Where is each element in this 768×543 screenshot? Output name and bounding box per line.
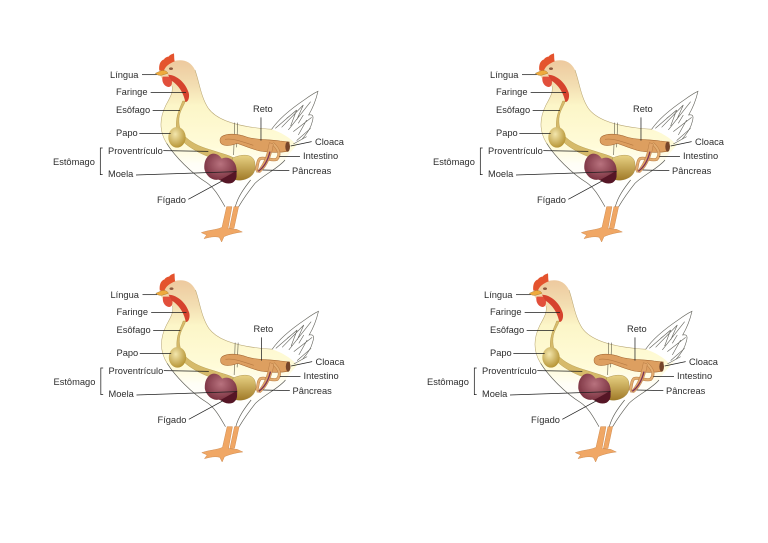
labels 2: Moela: [488, 169, 514, 179]
labels 2: Reto: [633, 104, 653, 114]
labels 1: Intestino: [303, 151, 338, 161]
labels 2: Proventrículo: [488, 146, 543, 156]
labels 4: Faringe: [490, 307, 522, 317]
labels 1: Esôfago: [116, 105, 150, 115]
labels 4: Língua: [484, 290, 513, 300]
labels 3: [54, 290, 345, 425]
labels 4: Proventrículo: [482, 366, 537, 376]
labels 4: Cloaca: [689, 357, 719, 367]
labels 3: Cloaca: [316, 357, 345, 367]
labels 1: [53, 70, 345, 205]
hen illustration 2: [480, 53, 698, 242]
labels 3: Fígado: [158, 415, 186, 425]
panel 4: digestive system of hen, bottom right: [427, 273, 719, 462]
labels 1: Cloaca: [315, 137, 345, 147]
labels 1: Moela: [108, 169, 134, 179]
labels 2: Papo: [496, 128, 518, 138]
labels 3: Reto: [254, 324, 273, 334]
labels 4: Pâncreas: [666, 386, 706, 396]
labels 4: Papo: [490, 348, 512, 358]
labels 1: Faringe: [116, 87, 148, 97]
labels 1: Língua: [110, 70, 139, 80]
labels 1: Proventrículo: [108, 146, 163, 156]
labels 3: Moela: [108, 389, 135, 399]
labels 1: Estômago: [53, 157, 95, 167]
labels 3: Estômago: [54, 377, 95, 387]
labels 2: [433, 70, 725, 205]
panel 3: digestive system of hen, bottom left: [54, 273, 345, 462]
labels 3: Esôfago: [116, 325, 151, 335]
labels 3: Intestino: [304, 371, 339, 381]
labels 4: Moela: [482, 389, 508, 399]
hen illustration 1: [100, 53, 318, 242]
labels 2: Intestino: [683, 151, 718, 161]
labels 3: Faringe: [116, 307, 148, 317]
hen illustration 4: [474, 273, 692, 462]
labels 4: Reto: [627, 324, 647, 334]
labels 2: Língua: [490, 70, 519, 80]
labels 4: [427, 290, 719, 425]
panel 2: digestive system of hen, top right: [433, 53, 725, 242]
labels 2: Fígado: [537, 195, 566, 205]
labels 2: Estômago: [433, 157, 475, 167]
labels 3: Papo: [116, 348, 138, 358]
labels 3: Pâncreas: [292, 386, 332, 396]
labels 4: Estômago: [427, 377, 469, 387]
labels 1: Papo: [116, 128, 138, 138]
labels 1: Fígado: [157, 195, 186, 205]
labels 1: Reto: [253, 104, 273, 114]
panel 1: digestive system of hen, top left: [53, 53, 345, 242]
labels 3: Proventrículo: [108, 366, 163, 376]
labels 3: Língua: [110, 290, 140, 300]
labels 4: Fígado: [531, 415, 560, 425]
labels 4: Intestino: [677, 371, 712, 381]
labels 2: Faringe: [496, 87, 528, 97]
labels 2: Pâncreas: [672, 166, 712, 176]
labels 2: Esôfago: [496, 105, 530, 115]
hen illustration 3: [101, 273, 318, 462]
labels 2: Cloaca: [695, 137, 725, 147]
labels 4: Esôfago: [490, 325, 524, 335]
labels 1: Pâncreas: [292, 166, 332, 176]
